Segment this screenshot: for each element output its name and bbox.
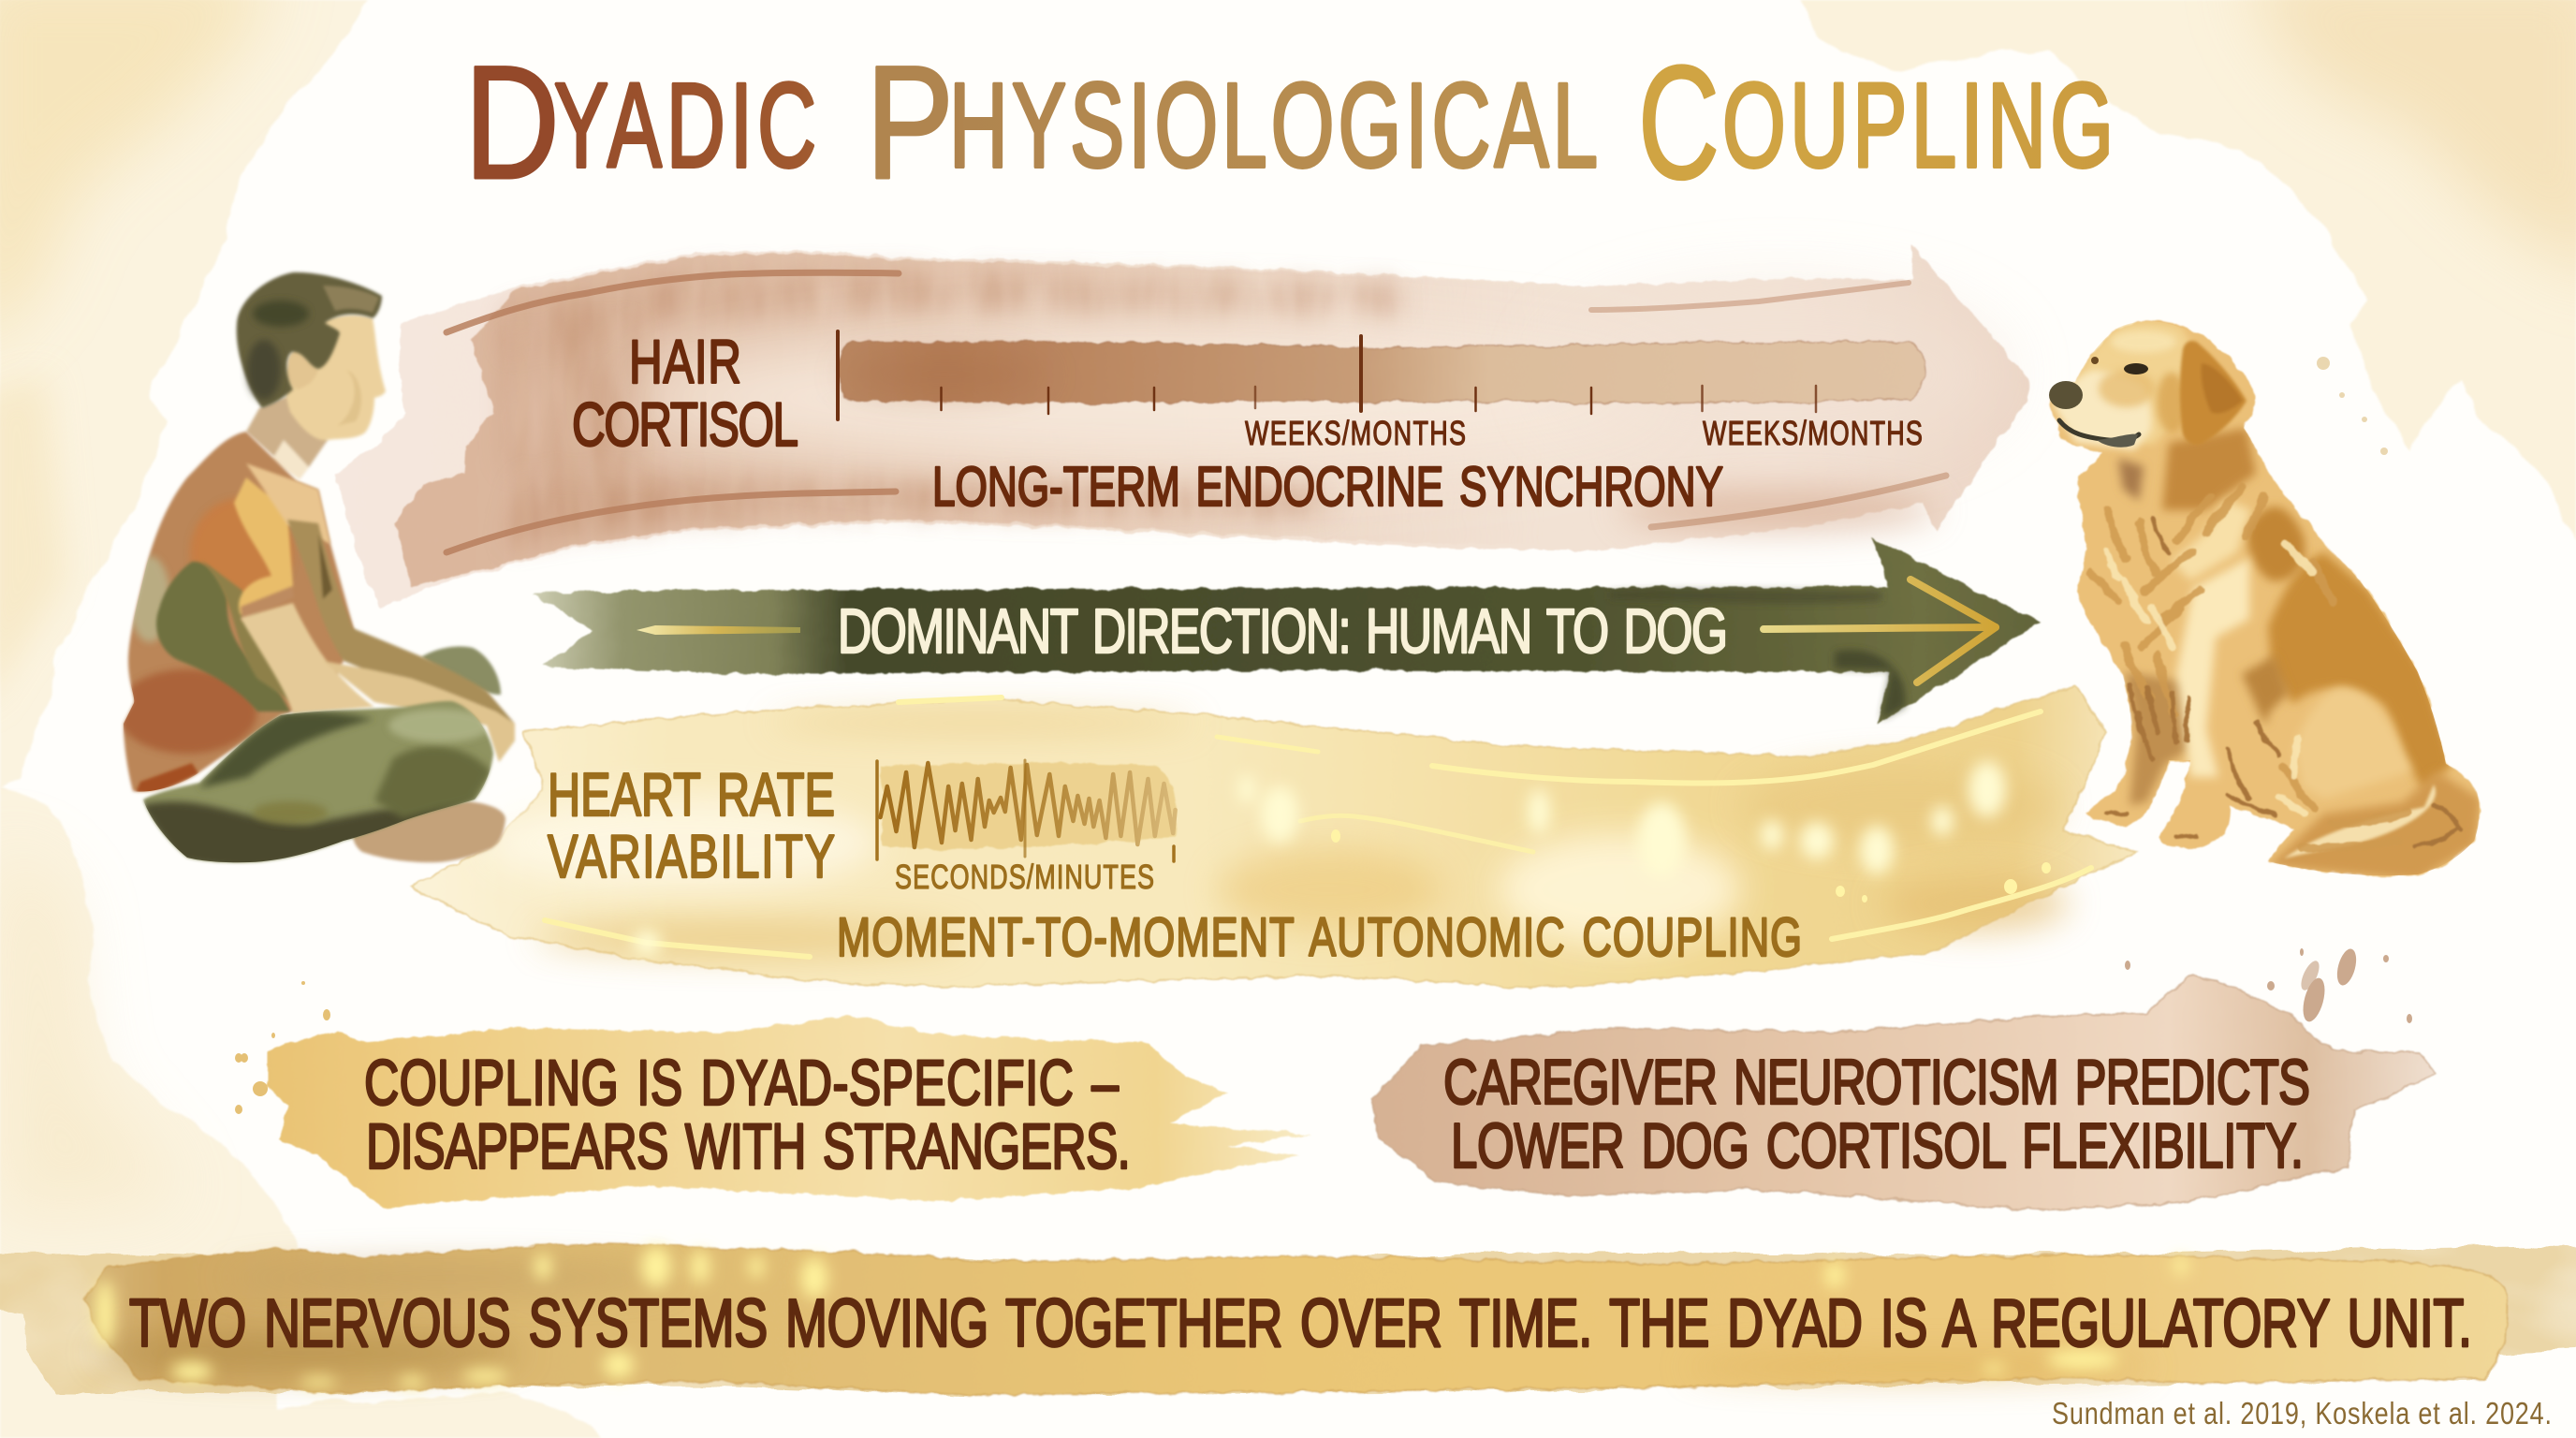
- caption: long-term endocrine synchrony: LONG-TERM ENDOCRINE SYNCHRONY: [932, 457, 1723, 519]
- banner outer wash: [0, 1245, 2576, 1395]
- yellow brush shape: [268, 1016, 1313, 1208]
- center lightening: [627, 290, 2003, 531]
- title initial D: D: [464, 34, 560, 213]
- title initial C: C: [1638, 34, 1720, 213]
- far knee: [421, 646, 501, 695]
- face: [285, 315, 386, 440]
- figure: seated human: [117, 272, 515, 871]
- callout spatter: [2125, 946, 2412, 1024]
- stain: top left: [0, 0, 393, 814]
- label: heart rate variability: VARIABILITY: [548, 823, 835, 891]
- brush streak lines: [446, 272, 1946, 552]
- foot: [353, 801, 505, 862]
- banner text: TWO NERVOUS SYSTEMS MOVING TOGETHER OVER TIME. THE DYAD IS A REGULATORY UNIT.: [129, 1286, 2472, 1361]
- label: heart rate variability: HEART RATE: [548, 761, 835, 829]
- callout text: LOWER DOG CORTISOL FLEXIBILITY.: [1451, 1110, 2304, 1181]
- ribbon light streaks: [545, 697, 2091, 957]
- title small caps letters: [554, 59, 2114, 193]
- legs washes: [140, 709, 491, 871]
- spatter near stain: [2317, 357, 2388, 455]
- arrow label: DOMINANT DIRECTION: HUMAN TO DOG: [838, 595, 1728, 667]
- yellow ribbon shape: [411, 685, 2136, 988]
- banner main wash: [84, 1243, 2507, 1395]
- callout text: DISAPPEARS WITH STRANGERS.: [366, 1110, 1131, 1182]
- dog head: [2053, 321, 2195, 450]
- callout text: [364, 1047, 1131, 1182]
- label: heart rate variability: [548, 761, 835, 891]
- arm: [241, 520, 515, 762]
- torso shirt: [124, 432, 356, 792]
- brown brush arrow shape: [334, 244, 2031, 607]
- banner darker washes: [94, 1265, 2153, 1378]
- dog ear: [2180, 341, 2247, 445]
- label: hair cortisol: HAIR: [629, 328, 741, 397]
- title small caps letters: OUPLING: [1722, 59, 2114, 193]
- stain: bottom left: [0, 772, 622, 1438]
- title small caps letters: YADIC: [554, 59, 816, 193]
- dog body washes: [2118, 428, 2481, 880]
- ribbon small gold dots: [1331, 829, 2051, 902]
- dark wash at arrow head: [1610, 590, 1906, 719]
- gold arrow streak right: [1764, 580, 1996, 682]
- figure: golden retriever: [2049, 321, 2481, 880]
- title initial P: P: [866, 34, 954, 213]
- olive arrow shape: [531, 537, 2041, 725]
- tan brush shape: [1372, 976, 2436, 1211]
- sleeve and shoulder light: [234, 463, 330, 622]
- panel: hair cortisol long-term arrow: [334, 244, 2031, 607]
- title: [464, 34, 2114, 213]
- callout text: COUPLING IS DYAD-SPECIFIC –: [364, 1047, 1119, 1119]
- vertical pigment streaks: [505, 270, 1404, 548]
- stain: top right: [1791, 0, 2576, 599]
- hair: [237, 272, 382, 408]
- callout: caregiver neuroticism: [1372, 946, 2436, 1211]
- gold shaft streak left: [637, 625, 800, 635]
- banner gold sparkles: [95, 1246, 2188, 1387]
- label: hair cortisol: CORTISOL: [572, 390, 798, 460]
- callout text: CAREGIVER NEUROTICISM PREDICTS: [1443, 1047, 2310, 1118]
- tick label 1: WEEKS/MONTHS: [1245, 414, 1466, 452]
- dog fur strokes: [2092, 487, 2462, 848]
- panel: dominant direction arrow: [531, 537, 2041, 725]
- dog body silhouette: [2050, 321, 2479, 875]
- callout text: [1443, 1047, 2310, 1181]
- timeline bar with ticks: [838, 331, 1925, 419]
- banner: takeaway: [0, 1243, 2576, 1395]
- callout: coupling is dyad-specific: [235, 981, 1313, 1208]
- HRV waveform chart: [877, 760, 1176, 861]
- ribbon washes: [487, 713, 2069, 955]
- legs: [143, 701, 493, 862]
- caption: moment-to-moment autonomic coupling: MOMENT-TO-MOMENT AUTONOMIC COUPLING: [837, 907, 1802, 967]
- citation: Sundman et al. 2019, Koskela et al. 2024.: [2052, 1398, 2552, 1431]
- panel: heart rate variability ribbon: [411, 685, 2136, 988]
- callout spatter: [235, 981, 330, 1114]
- darker wash patch: [394, 253, 1554, 587]
- ribbon glow sparkles: [633, 761, 2006, 956]
- tick label 2: WEEKS/MONTHS: [1703, 414, 1923, 452]
- axis label: seconds/minutes: SECONDS/MINUTES: [895, 858, 1154, 896]
- title small caps letters: HYSIOLOGICAL: [949, 59, 1598, 193]
- label: hair cortisol: [572, 328, 798, 460]
- neck: [246, 393, 328, 479]
- shirt washes: [117, 498, 293, 794]
- dog nose, mouth and eyes: [2049, 357, 2148, 448]
